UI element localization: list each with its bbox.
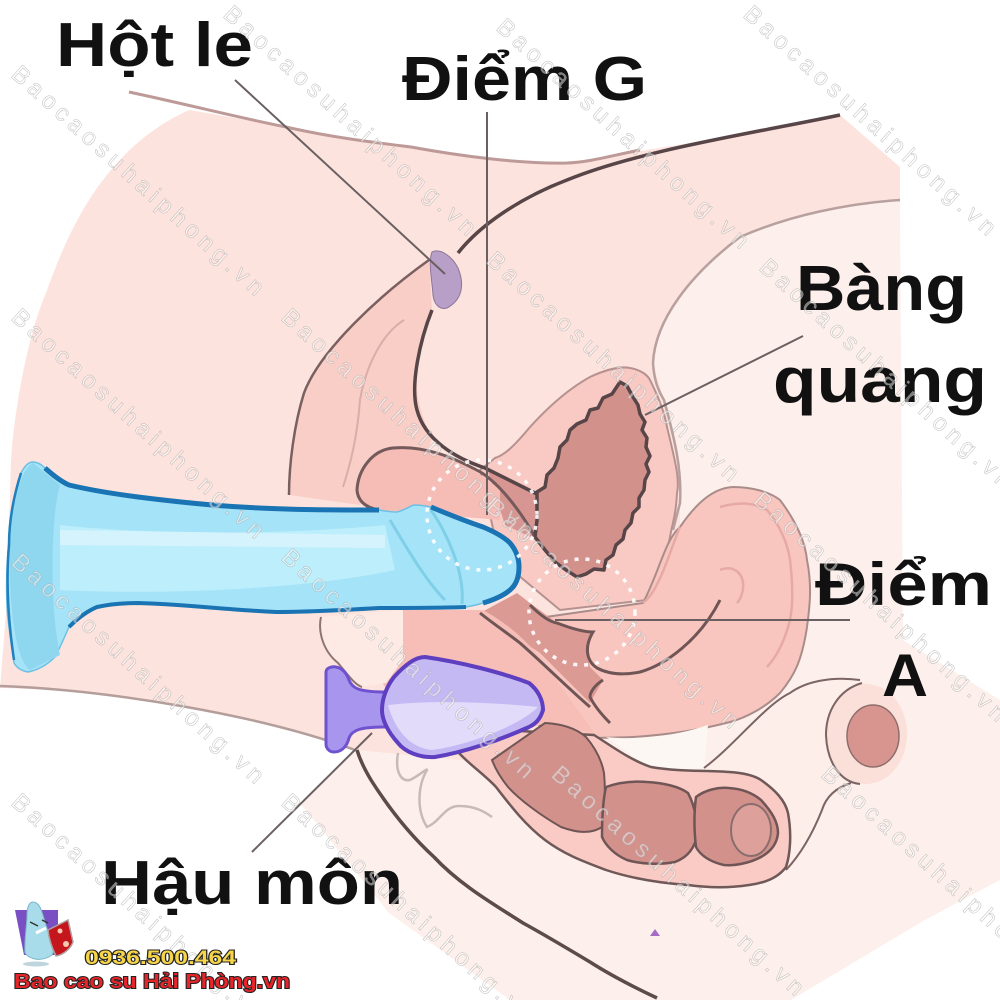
watermark text: Baocaosuhaiphong.vn bbox=[738, 0, 1000, 241]
rectum end ring bbox=[731, 804, 771, 856]
inner abdominal contour bbox=[653, 200, 900, 530]
watermark text: Baocaosuhaiphong.vn bbox=[491, 13, 754, 254]
line: bladder bbox=[645, 336, 803, 415]
upper canal dark tissue bbox=[487, 468, 537, 540]
tissue below toy bbox=[380, 610, 594, 753]
A-spot dotted circle bbox=[529, 559, 635, 665]
label: Điểm A: Điểm bbox=[815, 551, 992, 618]
upper body outline bbox=[129, 92, 640, 163]
bladder wall bbox=[480, 367, 678, 610]
uterus fold lines bbox=[643, 504, 792, 667]
watermark text: Baocaosuhaiphong.vn bbox=[276, 543, 539, 784]
label: Bàng quang: Bàng bbox=[796, 252, 967, 324]
ovary bbox=[825, 684, 907, 784]
ovary center bbox=[847, 705, 899, 767]
icon: clitoris bbox=[430, 251, 462, 308]
plug base and neck bbox=[326, 667, 386, 752]
watermark text: Baocaosuhaiphong.vn bbox=[218, 0, 481, 241]
line: A-spot bbox=[555, 619, 850, 621]
plug highlight bbox=[388, 702, 538, 750]
watermark text: Baocaosuhaiphong.vn bbox=[546, 760, 809, 1000]
clitoral hood bbox=[289, 260, 432, 505]
rectum second lobe bbox=[602, 782, 697, 864]
pale lower and right body area bbox=[300, 200, 1000, 1000]
left thigh outline bbox=[0, 686, 355, 750]
logo: site name: Bao cao su Hải Phòng.vn bbox=[14, 971, 290, 993]
purple toy bbox=[326, 657, 543, 757]
watermark text: Baocaosuhaiphong.vn bbox=[481, 246, 744, 487]
label: Điểm A: A bbox=[882, 642, 928, 709]
watermark text: Baocaosuhaiphong.vn bbox=[481, 493, 744, 734]
logo: phone number: 0936.500.464 bbox=[85, 948, 237, 969]
blue toy bbox=[7, 462, 519, 672]
bladder cavity bbox=[535, 382, 650, 577]
rectum outer bbox=[459, 730, 790, 887]
toy head ridges bbox=[390, 510, 462, 604]
watermark text: Baocaosuhaiphong.vn bbox=[276, 303, 539, 544]
main body silhouette bbox=[0, 110, 900, 760]
upper vaginal wall lobe bbox=[357, 448, 500, 520]
toy dark upper edge bbox=[45, 468, 519, 603]
folds near anus bbox=[397, 753, 492, 827]
toy dark lower edge bbox=[69, 603, 466, 627]
white gap between uterus and rectum bbox=[606, 725, 708, 769]
label: Hậu môn: Hậu môn bbox=[101, 849, 403, 918]
line: G-spot bbox=[486, 112, 488, 515]
label: Điểm A bbox=[815, 551, 992, 709]
plug body bbox=[382, 657, 543, 757]
line: clitoris bbox=[235, 80, 445, 274]
G-spot dotted circle bbox=[427, 460, 537, 570]
label: Bàng quang: quang bbox=[773, 344, 987, 416]
toy flange shade bbox=[10, 463, 60, 670]
dark abdominal wall contour bbox=[458, 115, 840, 253]
label: Điểm G: Điểm G bbox=[402, 45, 647, 114]
lower labia bbox=[320, 610, 403, 687]
cervix lines bbox=[530, 600, 720, 723]
rectum first lobe bbox=[492, 723, 605, 832]
ligament to ovary bbox=[704, 680, 871, 870]
lower outer contour bbox=[357, 750, 657, 998]
watermark text: Baocaosuhaiphong.vn bbox=[6, 60, 269, 301]
callout lines bbox=[235, 80, 850, 852]
logo: mascot bbox=[15, 902, 73, 966]
toy highlight bbox=[60, 525, 395, 592]
label: Bàng quang bbox=[773, 252, 987, 416]
toy body bbox=[7, 462, 519, 672]
canal and cervix channel bbox=[480, 593, 603, 703]
line: anus bbox=[252, 733, 372, 852]
rectum third lobe bbox=[694, 788, 778, 865]
small mark bbox=[650, 929, 660, 936]
label: Hột le: Hột le bbox=[56, 11, 253, 80]
watermark text: Baocaosuhaiphong.vn bbox=[6, 548, 269, 789]
watermark text: Baocaosuhaiphong.vn bbox=[6, 303, 269, 544]
uterus bbox=[525, 487, 810, 738]
vaginal wall contour bbox=[415, 310, 537, 494]
